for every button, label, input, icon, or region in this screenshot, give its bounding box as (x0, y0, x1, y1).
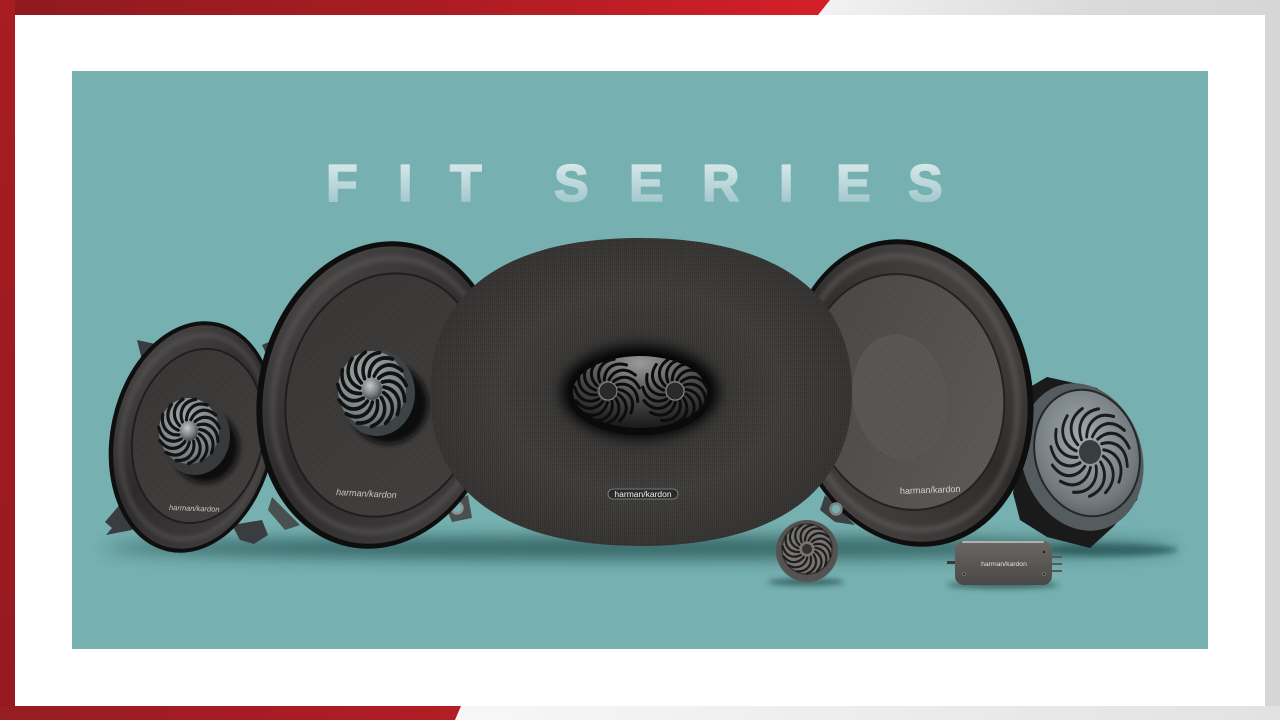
fan (1041, 398, 1132, 503)
mounting tabs (268, 495, 472, 530)
disc (1002, 367, 1162, 547)
teal panel (72, 71, 1208, 649)
badge: harman/kardon (614, 489, 672, 499)
brand label: harman/kardon (900, 484, 961, 496)
grille (259, 251, 511, 539)
tweeter (329, 344, 428, 444)
small dome tweeter (776, 519, 838, 582)
rim (228, 218, 532, 572)
body (776, 520, 838, 582)
fabric texture (430, 238, 852, 546)
hub (1079, 440, 1101, 464)
right fan (635, 352, 710, 428)
surround highlight (102, 321, 286, 553)
surround highlight (774, 236, 1042, 550)
large coaxial speaker (228, 218, 532, 572)
title: FIT SERIES (326, 155, 943, 213)
mounting tabs (105, 337, 282, 544)
rim (88, 306, 297, 568)
brand label: harman/kardon (169, 503, 220, 514)
ring (782, 524, 832, 574)
crossover box (947, 541, 1062, 585)
screws (962, 550, 1046, 576)
connectors (947, 556, 1062, 572)
surround (235, 224, 527, 566)
dome (843, 327, 957, 467)
fabric body (430, 238, 852, 546)
grille (115, 335, 281, 537)
grille (780, 252, 1030, 532)
surround highlight (248, 238, 516, 552)
top highlight (962, 541, 1044, 543)
housing (1013, 377, 1143, 548)
rim (758, 216, 1062, 570)
mounting tab (820, 495, 855, 525)
woofer speaker (758, 216, 1062, 570)
recess shadow (562, 346, 718, 438)
small coaxial speaker (88, 306, 297, 568)
product shadows (105, 537, 1178, 588)
faceted midrange driver (1002, 367, 1162, 548)
brand label: harman/kardon (336, 487, 397, 500)
central speaker (430, 238, 852, 546)
cavity (569, 357, 711, 435)
surround (93, 310, 293, 564)
left fan (567, 352, 642, 428)
surround (763, 222, 1055, 564)
fan (777, 519, 833, 577)
inner ring (1020, 378, 1154, 528)
brand label: harman/kardon (981, 561, 1027, 568)
casing (955, 541, 1052, 585)
mounting ring (830, 504, 842, 514)
hub (802, 544, 812, 554)
tweeter (151, 392, 239, 483)
mounting ring (452, 502, 462, 514)
cavity panel (573, 356, 707, 428)
